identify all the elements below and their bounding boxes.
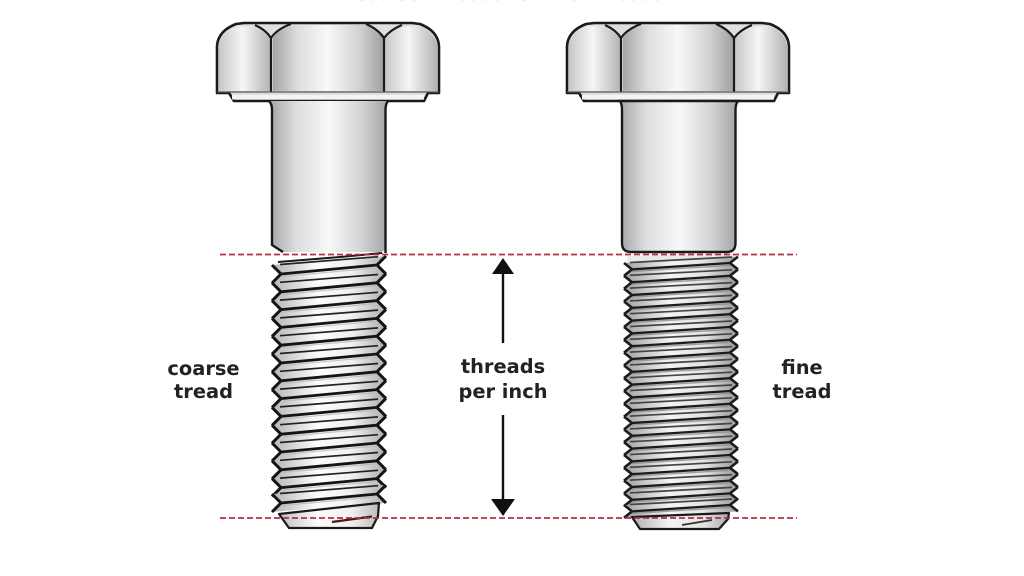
fine bolt head: [567, 23, 789, 101]
fine bolt: [567, 23, 789, 529]
coarse bolt threaded section: [272, 253, 386, 528]
label: coarse tread: coarse: [167, 357, 240, 380]
label: threads per inch: threads: [461, 355, 545, 378]
coarse bolt shank: [270, 101, 388, 252]
fine bolt threaded section: [624, 254, 738, 529]
red dashed guide: bottom of threads: [220, 517, 797, 519]
label: threads per inch: per inch: [458, 380, 548, 403]
fine bolt shank: [620, 101, 738, 252]
down arrow: [491, 415, 515, 516]
coarse bolt shank outline: [269, 101, 388, 253]
red dashed guide: top of threads: [220, 254, 797, 256]
label: fine tread: tread: [773, 380, 831, 403]
coarse bolt: [217, 23, 439, 528]
label: coarse tread: tread: [174, 380, 233, 403]
coarse bolt head: [217, 23, 439, 101]
label: fine tread: fine: [781, 356, 823, 379]
up arrow: [492, 258, 514, 343]
